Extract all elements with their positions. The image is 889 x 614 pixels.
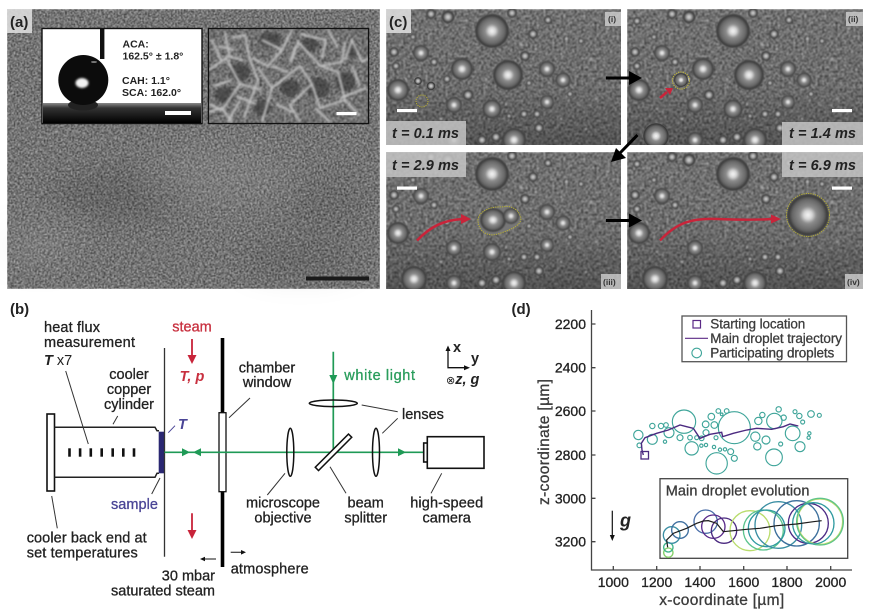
y axis tick labels: 2200 xyxy=(555,316,586,332)
time label: t = 0.1 ms xyxy=(392,126,459,142)
thermocouples xyxy=(68,448,135,457)
arrow: frame ii to iii xyxy=(611,135,638,162)
time label xyxy=(386,121,466,145)
red trajectory arrow xyxy=(417,214,471,240)
pressure side arrows xyxy=(200,550,246,561)
evolution circles xyxy=(663,498,843,557)
label: cooler back end: set temperatures xyxy=(27,546,138,562)
panel: (a) surface micrograph xyxy=(0,9,380,289)
y axis tick labels: 3000 xyxy=(555,490,586,506)
chamber inner wall xyxy=(164,348,166,557)
y axis tick labels xyxy=(555,316,586,550)
time label xyxy=(386,152,466,177)
label: T at sample: T xyxy=(178,417,188,433)
contact angle values: CAH: 1.1° xyxy=(122,75,170,87)
legend: Participating droplets xyxy=(710,346,835,360)
chamber wall xyxy=(221,338,224,567)
labels: cooler copper cylinder xyxy=(104,367,154,413)
label: microscope objective: microscope xyxy=(246,496,320,512)
red steam arrows xyxy=(188,339,196,539)
beam splitter xyxy=(315,434,352,471)
label: high-speed camera: camera xyxy=(423,511,472,527)
label: microscope objective xyxy=(246,496,320,527)
label: cooler back end: cooler back end at xyxy=(27,531,147,547)
time label xyxy=(782,152,863,177)
label: high-speed camera xyxy=(410,496,483,527)
panel: (b) experimental setup schematic xyxy=(10,301,484,600)
labels: steam, T, p xyxy=(172,320,212,385)
red trajectory arrow xyxy=(660,88,673,98)
scale bar xyxy=(832,109,852,112)
panel label (d): (d) xyxy=(512,301,531,318)
contact angle values: ACA: xyxy=(122,38,149,50)
label: white light: white light xyxy=(343,368,415,384)
coordinate axes icon: x xyxy=(453,340,461,356)
microscope objective xyxy=(287,428,294,476)
y axis tick labels: 3200 xyxy=(555,534,586,550)
x axis tick labels xyxy=(598,574,846,590)
inset: surface nanostructure xyxy=(208,28,368,124)
panel: (d) droplet trajectory plot xyxy=(512,301,852,609)
scale bar xyxy=(397,109,417,112)
y axis title: z-coordinate [µm] xyxy=(536,379,553,505)
frame label (i): (i) xyxy=(608,14,616,24)
label: beam splitter xyxy=(344,496,387,527)
x axis tick labels: 2000 xyxy=(815,574,846,590)
lens near camera xyxy=(372,428,380,476)
labels: cooler copper cylinder: cooler xyxy=(109,367,149,383)
label: 30 mbar saturated steam xyxy=(111,569,215,600)
inset: main droplet evolution xyxy=(660,479,848,558)
starting location marker xyxy=(641,452,648,459)
labels: heat flux measurement: heat flux xyxy=(44,320,101,336)
label: high-speed camera: high-speed xyxy=(410,496,483,512)
labels: steam, T, p: T, p xyxy=(180,369,204,385)
labels: cooler copper cylinder: cylinder xyxy=(104,397,154,413)
label: sample: sample xyxy=(111,497,158,513)
time label: t = 2.9 ms xyxy=(392,158,459,174)
evolution trajectory xyxy=(667,521,822,547)
x axis title: x-coordinate [µm] xyxy=(659,592,784,609)
label: 30 mbar saturated steam: 30 mbar xyxy=(162,569,215,585)
label: chamber window: window xyxy=(242,375,292,391)
legend xyxy=(682,316,846,362)
x axis tick labels: 1400 xyxy=(684,574,716,590)
panel: (c)(i) frame at t = 0.1 ms xyxy=(386,9,621,145)
large final droplet with yellow outline xyxy=(786,194,830,236)
panel: (c)(iii) frame at t = 2.9 ms xyxy=(386,152,621,289)
yellow outline of initial droplets xyxy=(416,95,428,107)
arrow: frame iii to iv xyxy=(606,214,642,228)
sample xyxy=(159,432,164,473)
time label xyxy=(782,122,863,145)
y axis tick labels: 2800 xyxy=(555,447,586,463)
x axis tick labels: 1000 xyxy=(598,574,629,590)
panel: (c)(ii) frame at t = 1.4 ms xyxy=(627,9,863,145)
copper cylinder xyxy=(54,427,159,477)
label: lenses: lenses xyxy=(402,407,444,423)
x axis tick labels: 1600 xyxy=(728,574,759,590)
labels: heat flux measurement xyxy=(44,320,135,369)
contact angle values: SCA: 162.0° xyxy=(122,87,181,99)
time label: t = 6.9 ms xyxy=(789,158,856,174)
time label: t = 1.4 ms xyxy=(789,126,856,142)
participating droplets xyxy=(634,407,821,474)
camera xyxy=(424,437,484,468)
panel label (a) xyxy=(7,9,32,33)
labels: cooler copper cylinder: copper xyxy=(107,382,151,398)
scale bar xyxy=(397,186,417,190)
top lens xyxy=(309,400,357,407)
labels: heat flux measurement: T x7 xyxy=(44,353,72,369)
leader lines xyxy=(52,371,442,528)
label: microscope objective: objective xyxy=(254,511,312,527)
g direction arrow xyxy=(610,511,631,541)
label: 30 mbar saturated steam: saturated steam xyxy=(111,584,215,600)
merged droplet with yellow outline xyxy=(478,206,521,235)
x axis tick labels: 1200 xyxy=(641,574,672,590)
green optical path xyxy=(164,352,424,456)
legend: Starting location xyxy=(710,316,805,332)
main droplet trajectory xyxy=(641,424,798,455)
yellow outline of coalesced droplet xyxy=(672,72,690,89)
x axis tick labels: 1800 xyxy=(771,574,803,590)
label: beam splitter: splitter xyxy=(344,511,387,527)
panel label (c): (c) xyxy=(389,14,407,31)
contact angle values: 162.5° ± 1.8° xyxy=(122,50,183,62)
frame label (iv) xyxy=(845,274,863,289)
panel: (c)(iv) frame at t = 6.9 ms xyxy=(627,152,863,289)
arrow: frame i to ii xyxy=(606,71,642,85)
frame label (iii) xyxy=(601,274,621,289)
scale bar xyxy=(832,186,852,190)
frame label (i) xyxy=(605,12,621,26)
y axis tick labels: 2400 xyxy=(555,360,586,376)
frame label (iii): (iii) xyxy=(603,277,616,287)
panel label (b): (b) xyxy=(10,301,29,318)
scale bar (a) xyxy=(306,276,369,280)
g direction arrow: g xyxy=(619,511,631,531)
axes xyxy=(592,310,852,570)
coordinate axes icon xyxy=(446,340,480,388)
red trajectory arrow xyxy=(660,214,781,240)
label: chamber window xyxy=(239,360,295,391)
label: atmosphere: atmosphere xyxy=(231,561,309,577)
labels: steam, T, p: steam xyxy=(172,320,212,336)
labels: heat flux measurement: measurement xyxy=(44,335,135,351)
cooler back end plate xyxy=(47,414,54,491)
panel label (c) xyxy=(386,9,411,33)
coordinate axes icon: y xyxy=(471,351,479,367)
frame label (ii): (ii) xyxy=(848,14,859,24)
inset: main droplet evolution: Main droplet evolution xyxy=(666,484,809,500)
label: beam splitter: beam xyxy=(348,496,384,512)
coordinate axes icon: ⊗z, g xyxy=(446,372,480,388)
frame label (ii) xyxy=(846,12,863,26)
legend: Main droplet trajectory xyxy=(710,331,842,346)
label: chamber window: chamber xyxy=(239,360,295,376)
chamber window xyxy=(219,413,226,492)
inset: droplet contact angle xyxy=(42,28,202,124)
contact angle values xyxy=(122,38,183,99)
frame label (iv): (iv) xyxy=(847,277,860,287)
y axis tick labels: 2600 xyxy=(555,403,586,419)
label: cooler back end xyxy=(27,531,147,562)
panel label (a): (a) xyxy=(10,14,28,31)
